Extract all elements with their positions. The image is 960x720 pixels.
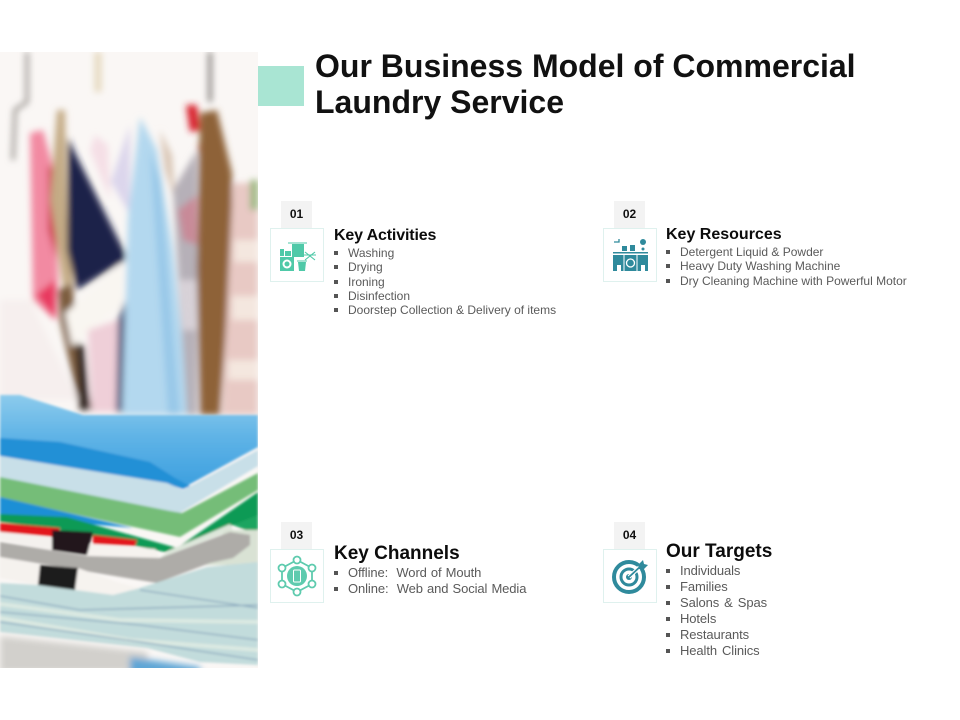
icon: laundry tools [270,228,324,282]
heading: Key Activities [334,227,436,244]
bullet list: Heavy Duty Washing Machine [680,259,840,273]
bullet list: Salons & Spas [680,595,767,610]
title: Laundry Service [315,84,564,120]
heading: Our Targets [666,541,772,562]
panel: key activities [270,201,556,317]
number badge 03: 03 [290,528,303,542]
heading: Key Resources [666,226,782,243]
panel: key channels [270,522,526,603]
bullet list: Detergent Liquid & Powder [680,245,823,259]
number badge 03 [281,522,312,549]
bullet list: Dry Cleaning Machine with Powerful Motor [680,274,907,288]
heading: Key Channels [334,543,460,564]
bullet list: Hotels [680,611,716,626]
bullet list: Drying [348,260,383,274]
bullet list: Online: Web and Social Media [348,581,526,596]
bullet list [666,245,907,288]
bullet list: Restaurants [680,627,749,642]
bullet list [334,565,526,596]
title: Our Business Model of Commercial [315,48,856,84]
panel: key resources [603,201,907,288]
accent block beside title [258,66,304,106]
icon: network with phone [270,549,324,603]
bullet list [334,246,556,317]
bullet list: Offline: Word of Mouth [348,565,481,580]
bullet list: Doorstep Collection & Delivery of items [348,303,556,317]
bullet list: Washing [348,246,394,260]
number badge 02: 02 [623,207,636,221]
number badge 01 [281,201,312,228]
number badge 01: 01 [290,207,303,221]
bullet list: Families [680,579,728,594]
bullet list: Ironing [348,275,385,289]
icon: target with arrow [603,549,657,603]
number badge 04: 04 [623,528,636,542]
bullet list: Health Clinics [680,643,760,658]
bullet list: Disinfection [348,289,410,303]
panel: our targets [603,522,772,658]
bullet list: Individuals [680,563,740,578]
number badge 02 [614,201,645,228]
icon: washing machines [603,228,657,282]
bullet list [666,563,767,658]
photo: laundry on hangers above folded clothes [0,52,258,668]
number badge 04 [614,522,645,549]
title [315,48,856,120]
